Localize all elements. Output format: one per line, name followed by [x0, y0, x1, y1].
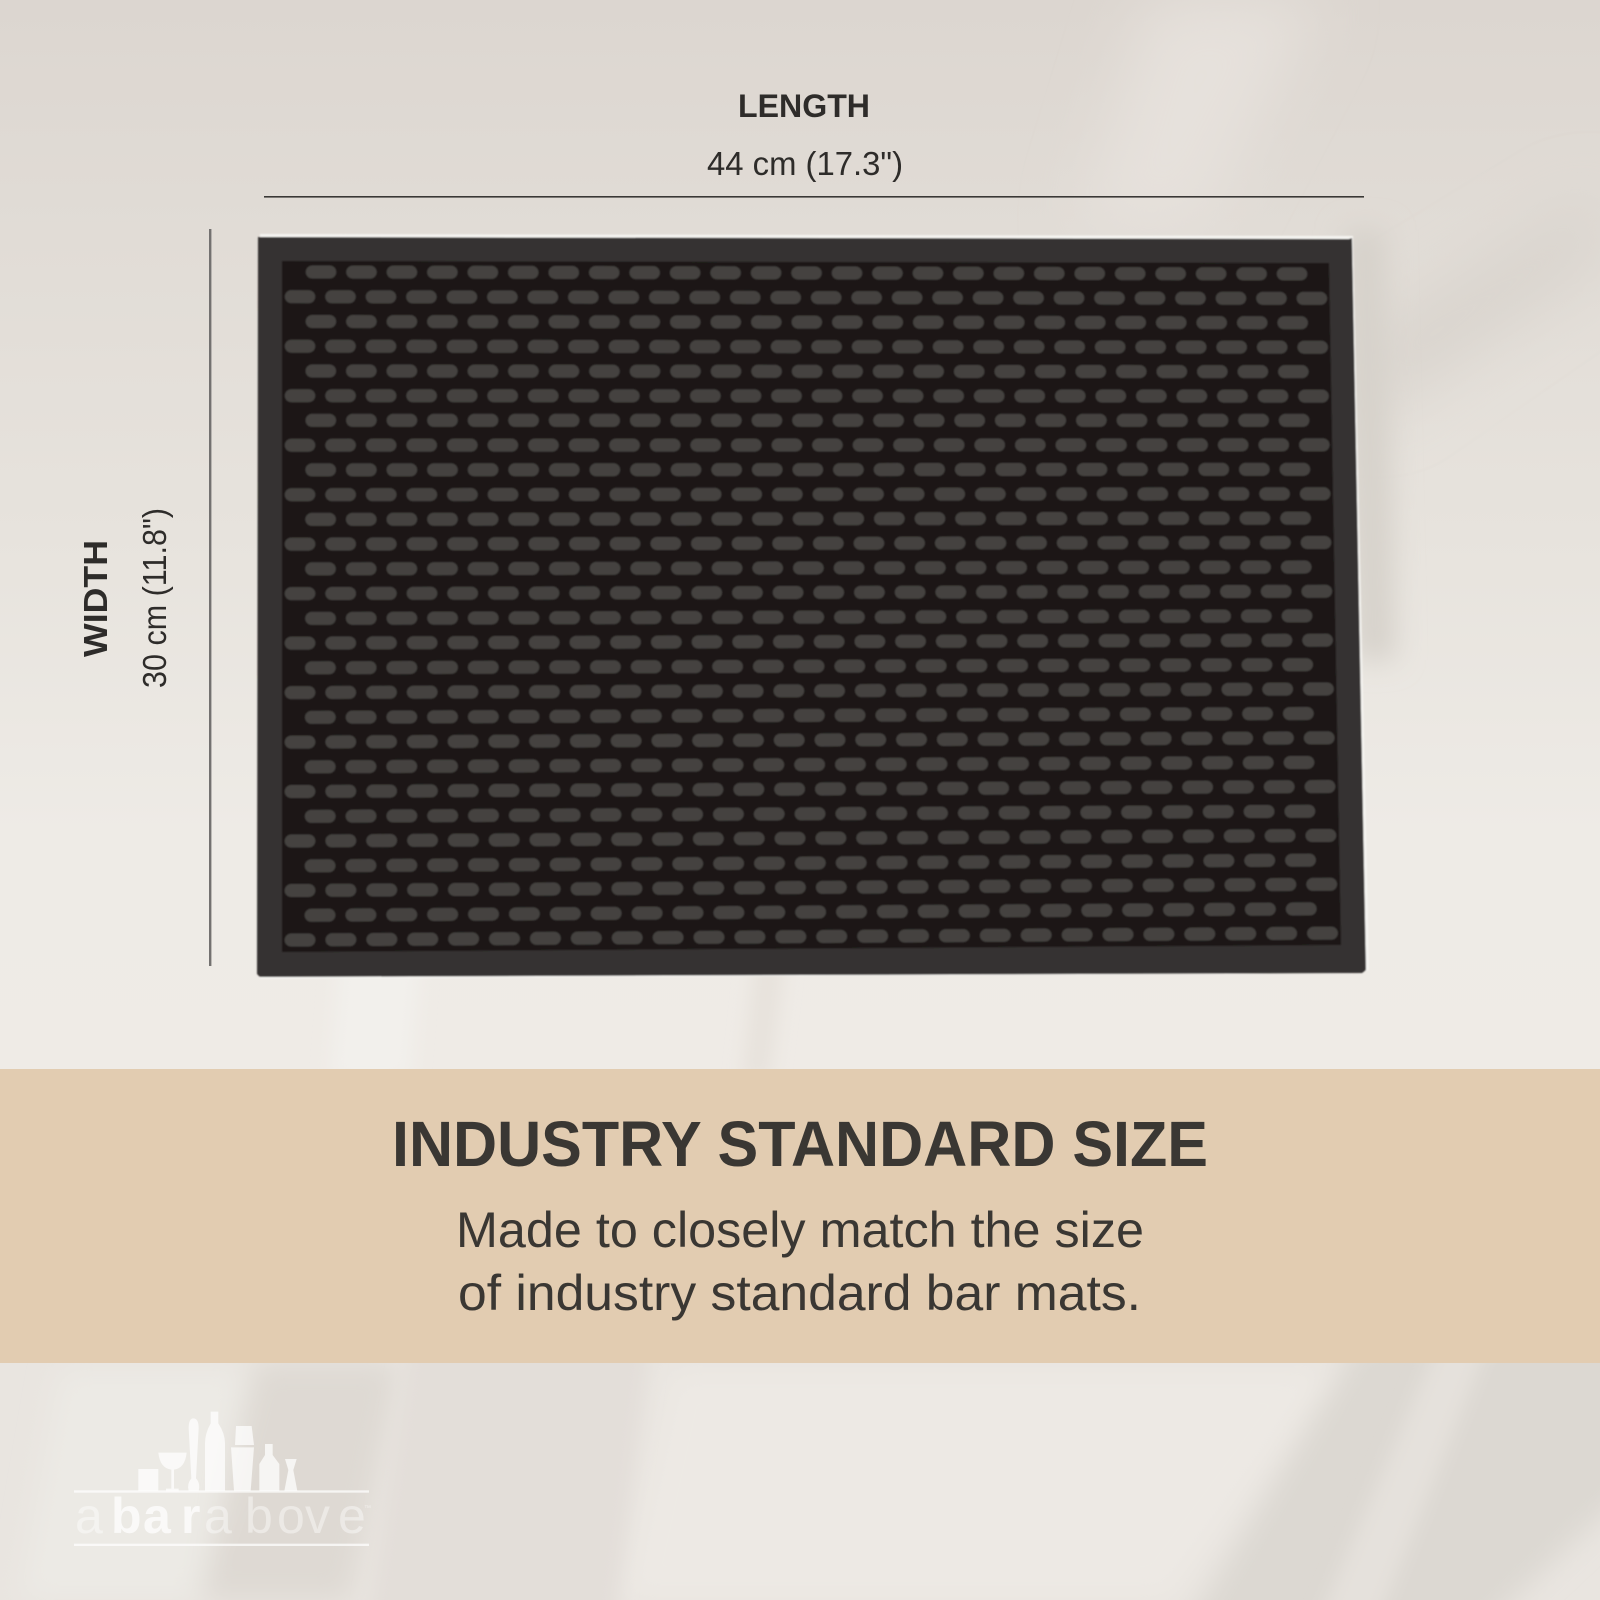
length label: [707, 88, 903, 182]
logo: a bar above: [74, 1412, 371, 1546]
bar mat: [257, 234, 1369, 979]
length dimension line: [264, 196, 1364, 198]
width label: WIDTH: [77, 540, 114, 657]
width label: [77, 508, 173, 688]
width dimension line: [209, 229, 211, 966]
logo wordmark: a: [75, 1488, 103, 1544]
width label: 30 cm (11.8"): [136, 508, 173, 688]
rubber pill rows: [285, 265, 1338, 947]
logo wordmark: ™: [364, 1505, 371, 1512]
logo wordmark: bar: [111, 1488, 200, 1544]
heading: INDUSTRY STANDARD SIZE: [392, 1108, 1208, 1180]
caption band: [0, 1069, 1600, 1363]
logo wordmark: above: [204, 1488, 366, 1544]
description text: [456, 1202, 1144, 1321]
logo wordmark: [75, 1488, 371, 1544]
icon: bar tools on shelf: [74, 1412, 369, 1546]
description text: of industry standard bar mats.: [458, 1265, 1141, 1321]
description text: Made to closely match the size: [456, 1202, 1144, 1258]
length label: LENGTH: [738, 88, 870, 124]
length label: 44 cm (17.3"): [707, 145, 903, 182]
